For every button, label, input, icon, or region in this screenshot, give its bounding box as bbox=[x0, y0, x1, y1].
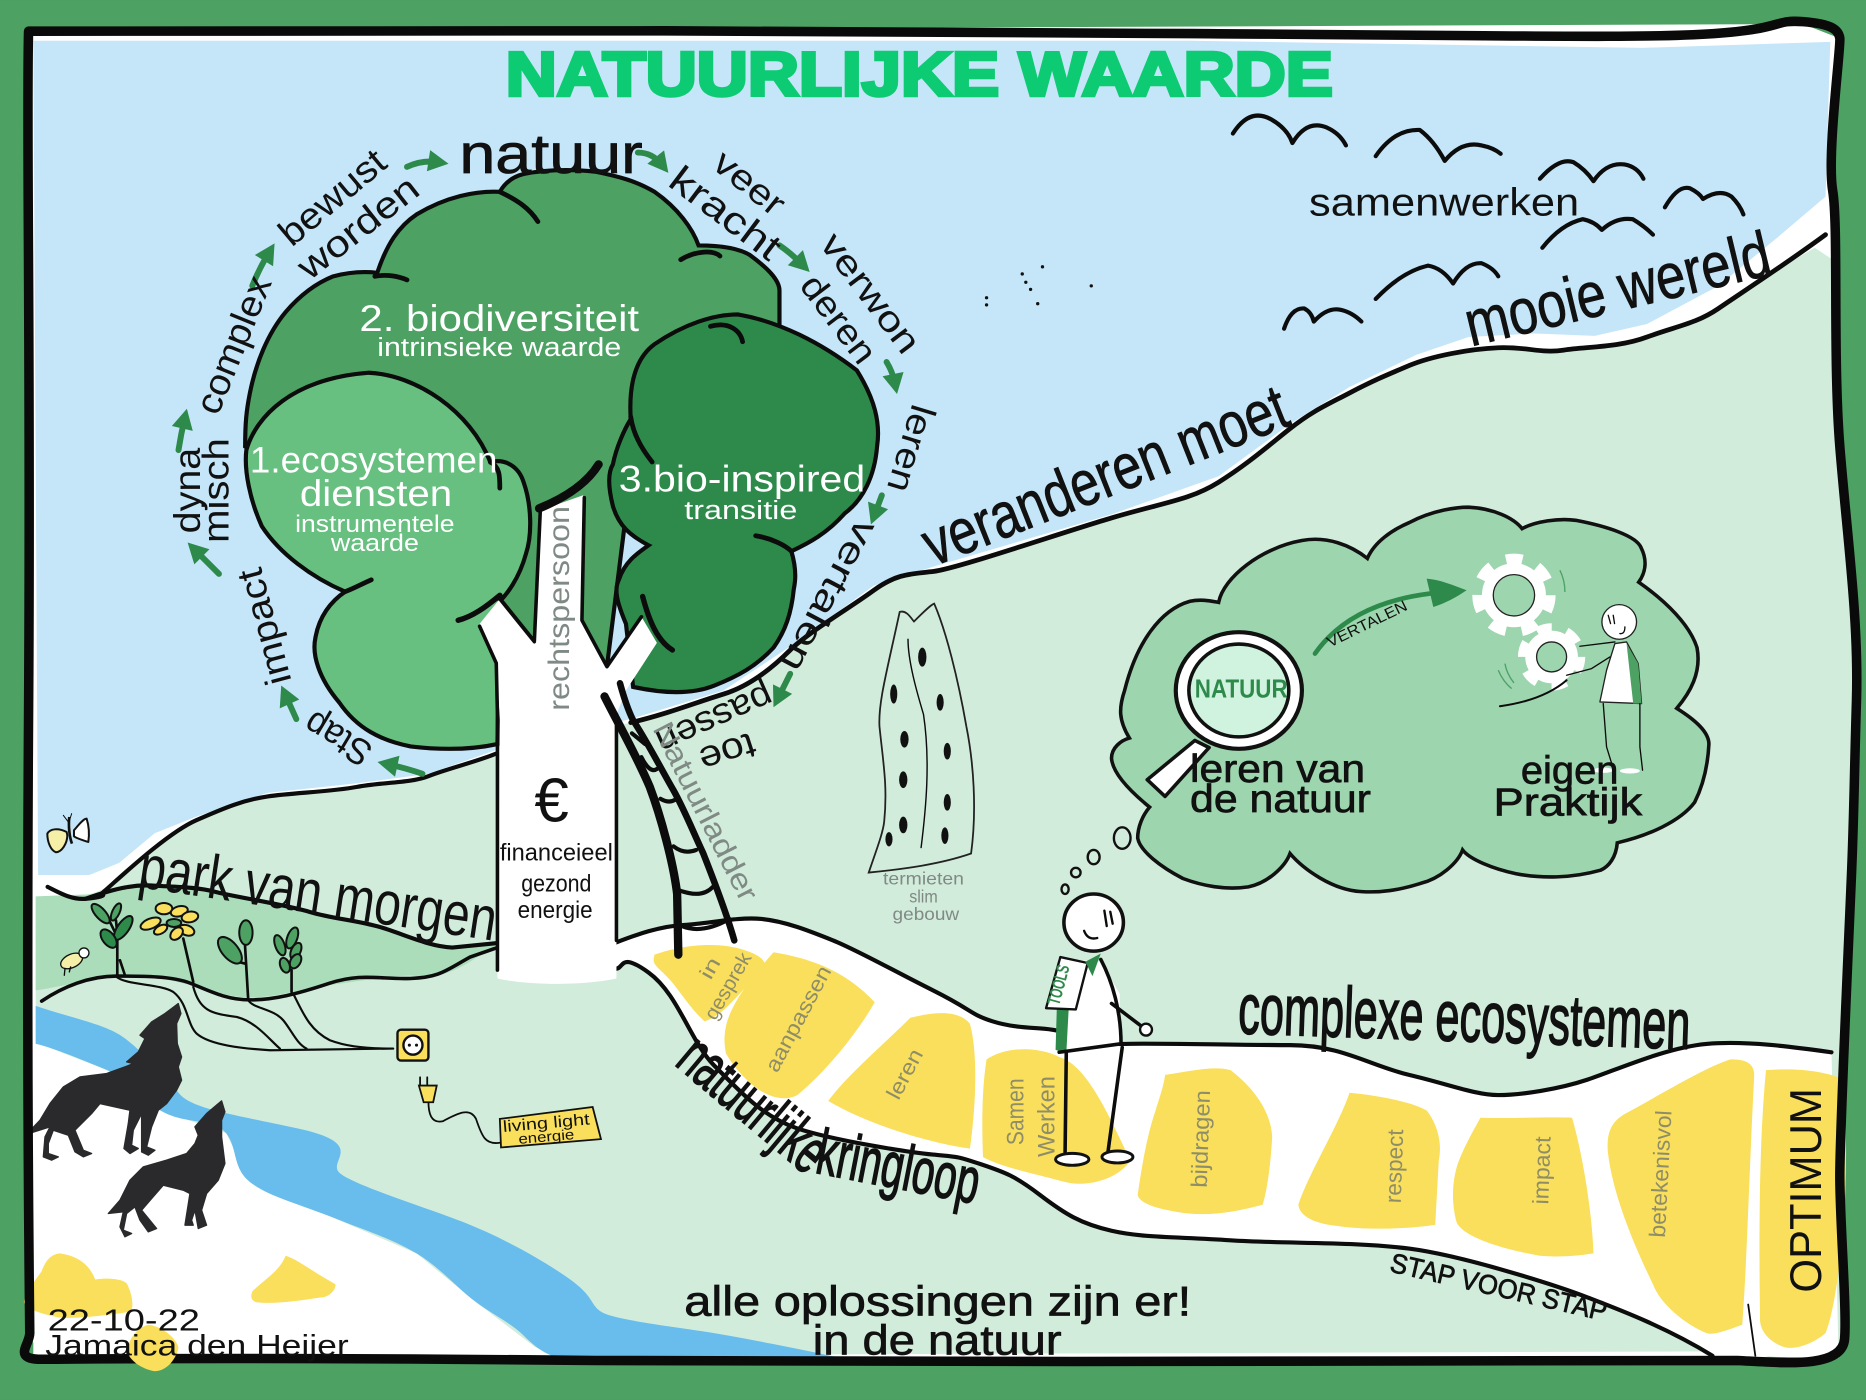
power outlet bbox=[397, 1030, 428, 1061]
veranderen moet label: veranderen moet bbox=[912, 370, 1298, 580]
living light box: energie bbox=[518, 1127, 575, 1148]
yellow blob over frame bbox=[127, 1325, 179, 1371]
stone: in gesprek bbox=[654, 945, 765, 1021]
hill outline left bbox=[48, 754, 496, 899]
solutions text bbox=[684, 1277, 1191, 1364]
stone labels bbox=[696, 948, 1677, 1238]
trunk text: energie bbox=[518, 897, 593, 924]
crown 2 text: 2. biodiversiteit bbox=[359, 298, 639, 339]
cycle words around tree: impact bbox=[229, 564, 299, 690]
circle arrows around tree bbox=[179, 153, 895, 774]
sky bbox=[33, 41, 1830, 875]
magnifying glass: NATUUR bbox=[1195, 674, 1288, 704]
termite mound bbox=[869, 604, 974, 873]
thought bubbles bbox=[1062, 827, 1131, 894]
termieten label: termieten bbox=[883, 868, 964, 888]
stone: betekenisvol bbox=[1608, 1059, 1754, 1334]
stone: bijdragen bbox=[1138, 1068, 1272, 1214]
stone: aanpassen bbox=[724, 952, 875, 1098]
yellow blobs bbox=[24, 1253, 336, 1318]
natuurladder label: Natuurladder bbox=[646, 717, 765, 907]
samenwerken label: samenwerken bbox=[1309, 181, 1579, 225]
path upper edge bbox=[615, 918, 1831, 1095]
stone labels: in bbox=[696, 954, 726, 983]
date and author bbox=[45, 1303, 349, 1363]
cycle words around tree: leren bbox=[879, 400, 943, 497]
plant 1 bbox=[89, 901, 136, 977]
crown 3 text bbox=[619, 459, 865, 525]
cycle words around tree: toe bbox=[694, 725, 761, 781]
cloud text: leren van de natuur: leren van bbox=[1190, 747, 1365, 791]
wolf 2 bbox=[108, 1101, 225, 1237]
stone labels: gesprek bbox=[700, 948, 757, 1024]
cycle words around tree: kracht bbox=[661, 158, 789, 270]
stone labels: leren bbox=[882, 1045, 928, 1103]
cycle words around tree bbox=[167, 122, 943, 781]
cycle words around tree: verwon bbox=[812, 225, 929, 361]
plant 4 bbox=[272, 926, 304, 992]
divider before optimum bbox=[1748, 1305, 1755, 1356]
cycle words around tree: dyna bbox=[167, 447, 208, 533]
stone labels: bijdragen bbox=[1187, 1090, 1215, 1188]
cloud text: leren van de natuur bbox=[1190, 747, 1371, 821]
crown 1 text bbox=[250, 440, 497, 557]
land outline below park bbox=[42, 948, 497, 1001]
tree trunk bbox=[458, 464, 672, 984]
vertalen arrow, gears and practice figure bbox=[1315, 559, 1643, 774]
cycle words around tree: natuur bbox=[459, 122, 643, 185]
solutions text: in de natuur bbox=[813, 1317, 1062, 1364]
mooie wereld label: mooie wereld bbox=[1457, 217, 1777, 360]
cloud text: leren van de natuur: de natuur bbox=[1190, 777, 1371, 821]
path lower edge bbox=[615, 962, 1712, 1356]
stone: optimum bbox=[1759, 1069, 1846, 1348]
crown 2 text: intrinsieke waarde bbox=[377, 332, 621, 362]
trunk text: gezond bbox=[521, 871, 591, 898]
natuurlijke kringloop label: kringloop bbox=[811, 1116, 986, 1218]
termieten label: slim bbox=[909, 886, 938, 906]
crown 3 text: 3.bio-inspired bbox=[619, 459, 865, 500]
cycle words around tree: misch bbox=[195, 438, 236, 543]
date and author: Jamaica den Heijer bbox=[45, 1330, 349, 1363]
magnifying glass bbox=[1147, 632, 1302, 796]
stone: respect bbox=[1298, 1093, 1440, 1229]
cloud text: eigen praktijk: Praktijk bbox=[1494, 780, 1643, 824]
solutions text: alle oplossingen zijn er! bbox=[684, 1277, 1191, 1324]
park van morgen label: park van morgen bbox=[135, 832, 502, 955]
distant dots bbox=[985, 265, 1093, 307]
crown 1 text: 1.ecosystemen bbox=[250, 440, 497, 481]
trunk text bbox=[500, 766, 613, 924]
crown 1 text: instrumentele bbox=[295, 511, 455, 538]
cloud text: eigen praktijk: eigen bbox=[1521, 748, 1618, 792]
stone labels: betekenisvol bbox=[1645, 1110, 1677, 1238]
stone: impact bbox=[1453, 1117, 1593, 1256]
gear large bbox=[1478, 559, 1550, 631]
stone labels: impact bbox=[1528, 1135, 1556, 1205]
plug and cable bbox=[419, 1077, 500, 1143]
termieten label bbox=[883, 868, 964, 924]
stone labels: Samen bbox=[1002, 1078, 1029, 1145]
stap voor stap label: STAP VOOR STAP bbox=[1387, 1247, 1610, 1327]
stone labels: aanpassen bbox=[760, 962, 836, 1076]
wolf 1 bbox=[27, 1004, 182, 1160]
tree crown accents bbox=[345, 192, 791, 592]
plants, flower, roots, bee and butterfly bbox=[47, 814, 393, 1050]
crown 1 text: diensten bbox=[300, 473, 452, 514]
park band bbox=[36, 885, 500, 998]
ladder bbox=[605, 683, 734, 955]
natuurlijke kringloop label: natuurlijke bbox=[665, 1020, 844, 1187]
white ground bottom left bbox=[33, 1042, 571, 1360]
title: NATUURLIJKE WAARDE bbox=[506, 40, 1333, 109]
butterfly bbox=[47, 814, 89, 852]
crown 3 text: transitie bbox=[684, 495, 797, 525]
termieten label: gebouw bbox=[893, 904, 959, 924]
river bbox=[36, 1006, 847, 1360]
optimum label: OPTIMUM bbox=[1782, 1088, 1831, 1293]
cycle words around tree: veer bbox=[705, 142, 794, 224]
tree crown 1: ecosystemen bbox=[246, 373, 530, 749]
date and author: 22-10-22 bbox=[48, 1303, 200, 1338]
bee bbox=[58, 948, 89, 975]
crown 1 text: waarde bbox=[330, 530, 419, 557]
cycle words around tree: vertalen bbox=[773, 513, 886, 679]
tree crown 2: biodiversiteit bbox=[245, 170, 779, 667]
tree crown 3: bio-inspired bbox=[609, 314, 878, 692]
cycle words around tree: worden bbox=[288, 167, 427, 288]
birds bbox=[1233, 116, 1743, 329]
thought cloud bbox=[1112, 507, 1709, 892]
walking figure: TOOLS bbox=[1044, 963, 1073, 1007]
crown 2 text bbox=[359, 298, 639, 362]
cycle words around tree: passen bbox=[650, 676, 779, 763]
path of stepping stones bbox=[615, 918, 1839, 1358]
cycle words around tree: deren bbox=[792, 267, 885, 371]
flower bbox=[139, 903, 199, 982]
walking figure bbox=[1044, 894, 1152, 1165]
cycle words around tree: complex bbox=[187, 269, 280, 420]
cloud text: eigen praktijk bbox=[1494, 748, 1643, 824]
living light box: living light bbox=[502, 1110, 591, 1136]
cycle words around tree: Stap bbox=[297, 703, 379, 775]
plant 3 bbox=[214, 920, 253, 1000]
stone: leren bbox=[828, 1013, 975, 1149]
living light box bbox=[500, 1107, 601, 1148]
cycle words around tree: bewust bbox=[270, 141, 394, 254]
vertalen arrow, gears and practice figure: VERTALEN bbox=[1324, 598, 1410, 651]
stone: samen werken bbox=[982, 1049, 1131, 1184]
land bbox=[36, 248, 1854, 1357]
hill outline upper bbox=[631, 235, 1826, 723]
roots bbox=[117, 977, 393, 1050]
stone labels: respect bbox=[1381, 1128, 1408, 1204]
trunk text: € bbox=[534, 766, 569, 835]
gear small bbox=[1523, 628, 1580, 686]
park outline bbox=[86, 885, 500, 948]
stone labels: Werken bbox=[1033, 1076, 1060, 1157]
trunk text: financeieel bbox=[500, 840, 613, 867]
rechtspersoon label: rechtspersoon bbox=[543, 506, 576, 711]
